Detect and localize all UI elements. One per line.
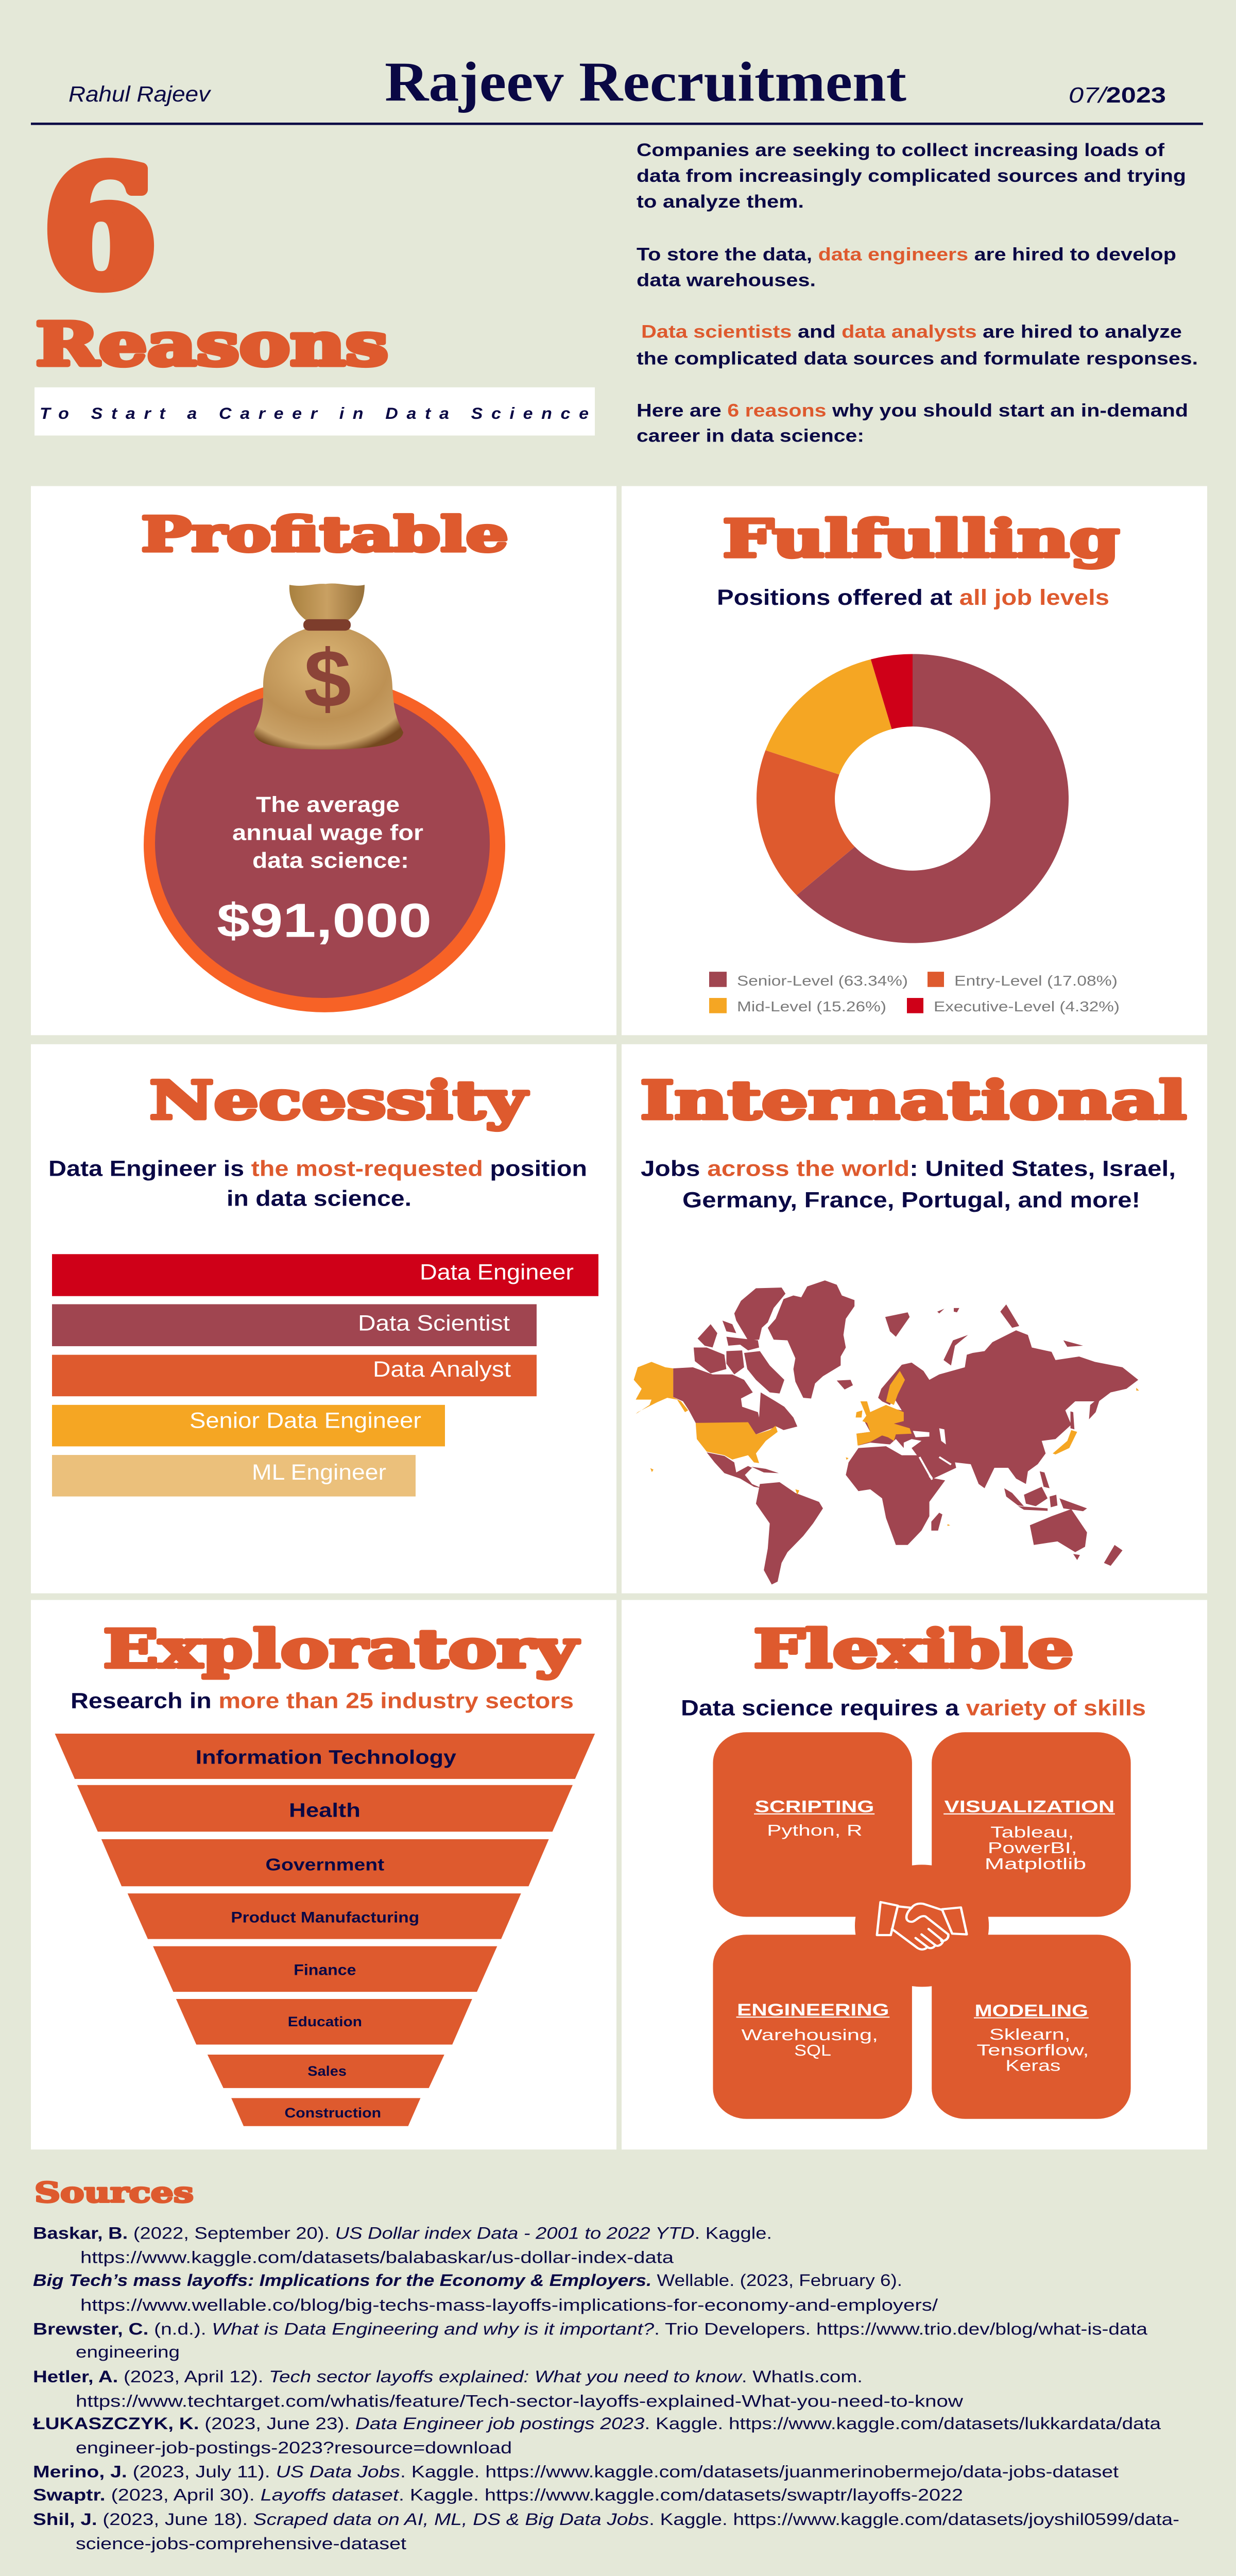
legend: Entry-Level (17.08%) <box>954 973 1118 989</box>
intro paragraph: Companies are seeking to collect increasing loads of <box>637 140 1165 160</box>
skill: modeling: MODELING <box>975 2002 1088 2020</box>
icon: money bag: $ <box>304 633 351 725</box>
bar chart: Data Scientist <box>358 1311 510 1335</box>
funnel chart: Information Technology <box>196 1747 456 1768</box>
skills diagram <box>713 1732 1131 2119</box>
reference list: Shil, J. (2023, June 18). Scraped data on AI, ML, DS & Big Data Jobs . Kaggle. https://www.kaggle.com/datasets/joyshil0599/data- <box>33 2510 1179 2529</box>
panel: Flexible <box>622 1600 1207 2149</box>
icon: money bag <box>254 584 403 750</box>
funnel chart: Health <box>289 1800 360 1821</box>
bar chart <box>52 1254 598 1497</box>
skill: scripting: SCRIPTING <box>755 1798 874 1816</box>
heading: Flexible: Flexible <box>753 1618 1074 1680</box>
skill: visualization <box>943 1798 1115 1872</box>
skill: visualization: Tableau, <box>990 1823 1074 1841</box>
bar chart: Data Engineer <box>420 1260 574 1284</box>
panel: Fulfilling <box>622 486 1207 1035</box>
subheading: Jobs across the world : United States, Israel, <box>641 1157 1176 1181</box>
intro paragraph: Here are 6 reasons why you should start an in-demand <box>637 400 1188 420</box>
intro paragraph: to analyze them. <box>637 191 804 211</box>
subheading: in data science. <box>227 1187 411 1211</box>
reference list: engineer-job-postings-2023?resource=download <box>76 2438 512 2458</box>
skill: visualization: PowerBI, <box>988 1839 1077 1857</box>
reference list: Big Tech’s mass layoffs: Implications for the Economy & Employers. Wellable. (2023, February 6). <box>33 2271 902 2290</box>
funnel chart: Sales <box>307 2063 347 2079</box>
donut chart <box>757 654 1069 943</box>
panel: Exploratory <box>31 1600 616 2149</box>
reference list: https://www.kaggle.com/datasets/balabaskar/us-dollar-index-data <box>80 2248 674 2267</box>
funnel chart: Finance <box>294 1961 356 1978</box>
hero heading <box>35 132 595 435</box>
intro paragraph: To store the data, data engineers are hired to develop <box>637 244 1176 264</box>
intro paragraph: the complicated data sources and formulate responses. <box>637 348 1198 368</box>
subheading: Data science requires a variety of skills <box>681 1696 1146 1720</box>
bar chart: Data Analyst <box>373 1358 511 1382</box>
heading: Necessity: Necessity <box>149 1069 528 1131</box>
wage text <box>217 792 432 947</box>
legend: Executive-Level (4.32%) <box>934 999 1120 1015</box>
panel: Profitable <box>31 486 616 1035</box>
wage circle <box>144 677 505 1012</box>
world map <box>634 1280 1139 1584</box>
heading: Fulfulling: Fulfulling <box>723 508 1120 569</box>
subtitle banner: To Start a Career in Data Science <box>40 404 589 422</box>
reference list: Merino, J. (2023, July 11). US Data Jobs . Kaggle. https://www.kaggle.com/datasets/juanmerinobermejo/data-jobs-dataset <box>33 2463 1119 2481</box>
legend: Senior-Level (63.34%) <box>737 973 908 989</box>
skill: modeling <box>974 2002 1089 2074</box>
heading: Profitable: Profitable <box>141 506 508 563</box>
reference list: ŁUKASZCZYK, K. (2023, June 23). Data Engineer job postings 2023 . Kaggle. https://www.kaggle.com/datasets/lukkardata/data <box>33 2414 1161 2433</box>
reference list: science-jobs-comprehensive-dataset <box>76 2534 407 2553</box>
wage text: data science: <box>252 849 409 873</box>
sources <box>33 2177 1179 2553</box>
date: 07/2023 <box>1069 83 1166 108</box>
skill: modeling: Tensorflow, <box>976 2041 1089 2059</box>
heading: International: International <box>640 1069 1187 1131</box>
reference list: Swaptr. (2023, April 30). Layoffs dataset . Kaggle. https://www.kaggle.com/datasets/swaptr/layoffs-2022 <box>33 2486 963 2504</box>
intro paragraph: Data scientists and data analysts are hired to analyze <box>641 321 1182 342</box>
intro paragraph: data from increasingly complicated sources and trying <box>637 165 1186 185</box>
wage text: annual wage for <box>232 821 423 845</box>
big number 6: 6 <box>43 132 157 323</box>
intro paragraph: career in data science: <box>637 426 864 446</box>
skill: scripting <box>754 1798 874 1839</box>
subheading <box>641 1157 1176 1212</box>
word Reasons: Reasons <box>36 310 388 379</box>
reference list: https://www.wellable.co/blog/big-techs-mass-layoffs-implications-for-economy-and-employers/ <box>80 2296 938 2315</box>
funnel chart <box>55 1734 595 2126</box>
reference list: Hetler, A. (2023, April 12). Tech sector layoffs explained: What you need to know . WhatIs.com. <box>33 2367 863 2386</box>
author name: Rahul Rajeev <box>68 82 212 107</box>
skill: visualization: VISUALIZATION <box>945 1798 1114 1816</box>
legend: Mid-Level (15.26%) <box>737 999 886 1015</box>
funnel chart: Construction <box>285 2105 381 2121</box>
reference list: engineering <box>76 2343 180 2362</box>
bar chart: Senior Data Engineer <box>190 1409 421 1433</box>
reference list <box>33 2224 1179 2553</box>
bar chart: ML Engineer <box>252 1461 386 1485</box>
wage text: $91,000 <box>217 894 432 947</box>
subheading: Germany, France, Portugal, and more! <box>682 1188 1140 1212</box>
intro paragraph <box>637 140 1198 446</box>
legend <box>709 972 1120 1015</box>
subheading: Research in more than 25 industry sectors <box>71 1689 574 1713</box>
skill: engineering: Warehousing, <box>742 2026 878 2044</box>
icon: handshake <box>877 1902 967 1950</box>
skill: engineering <box>736 2001 889 2059</box>
funnel chart: Product Manufacturing <box>231 1909 419 1926</box>
subheading: Positions offered at all job levels <box>717 586 1109 610</box>
subtitle banner <box>35 387 595 435</box>
title: Rajeev Recruitment <box>385 50 906 113</box>
panel: Necessity <box>31 1044 616 1594</box>
skill: modeling: Keras <box>1005 2057 1060 2074</box>
skill: scripting: Python, R <box>767 1821 862 1839</box>
reference list: Baskar, B. (2022, September 20). US Dollar index Data - 2001 to 2022 YTD . Kaggle. <box>33 2224 772 2243</box>
funnel chart: Government <box>265 1855 385 1874</box>
skill: engineering: SQL <box>794 2042 831 2059</box>
intro paragraph: data warehouses. <box>637 270 816 290</box>
heading: Sources: Sources <box>35 2177 194 2209</box>
subheading: Data Engineer is the most-requested position <box>48 1157 587 1181</box>
subheading <box>48 1157 587 1211</box>
reference list: https://www.techtarget.com/whatis/feature/Tech-sector-layoffs-explained-What-you-need-to-know <box>76 2392 964 2411</box>
panel: International <box>622 1044 1207 1594</box>
header <box>31 50 1203 125</box>
header rule <box>31 123 1203 125</box>
funnel chart: Education <box>288 2014 362 2029</box>
skill: modeling: Sklearn, <box>989 2025 1071 2043</box>
wage text: The average <box>256 792 400 817</box>
heading: Exploratory: Exploratory <box>103 1618 580 1680</box>
skill: visualization: Matplotlib <box>985 1855 1086 1872</box>
reference list: Brewster, C. (n.d.). What is Data Engineering and why is it important? . Trio Developers. https://www.trio.dev/blog/what-is-data <box>33 2320 1147 2338</box>
skill: engineering: ENGINEERING <box>737 2001 889 2020</box>
